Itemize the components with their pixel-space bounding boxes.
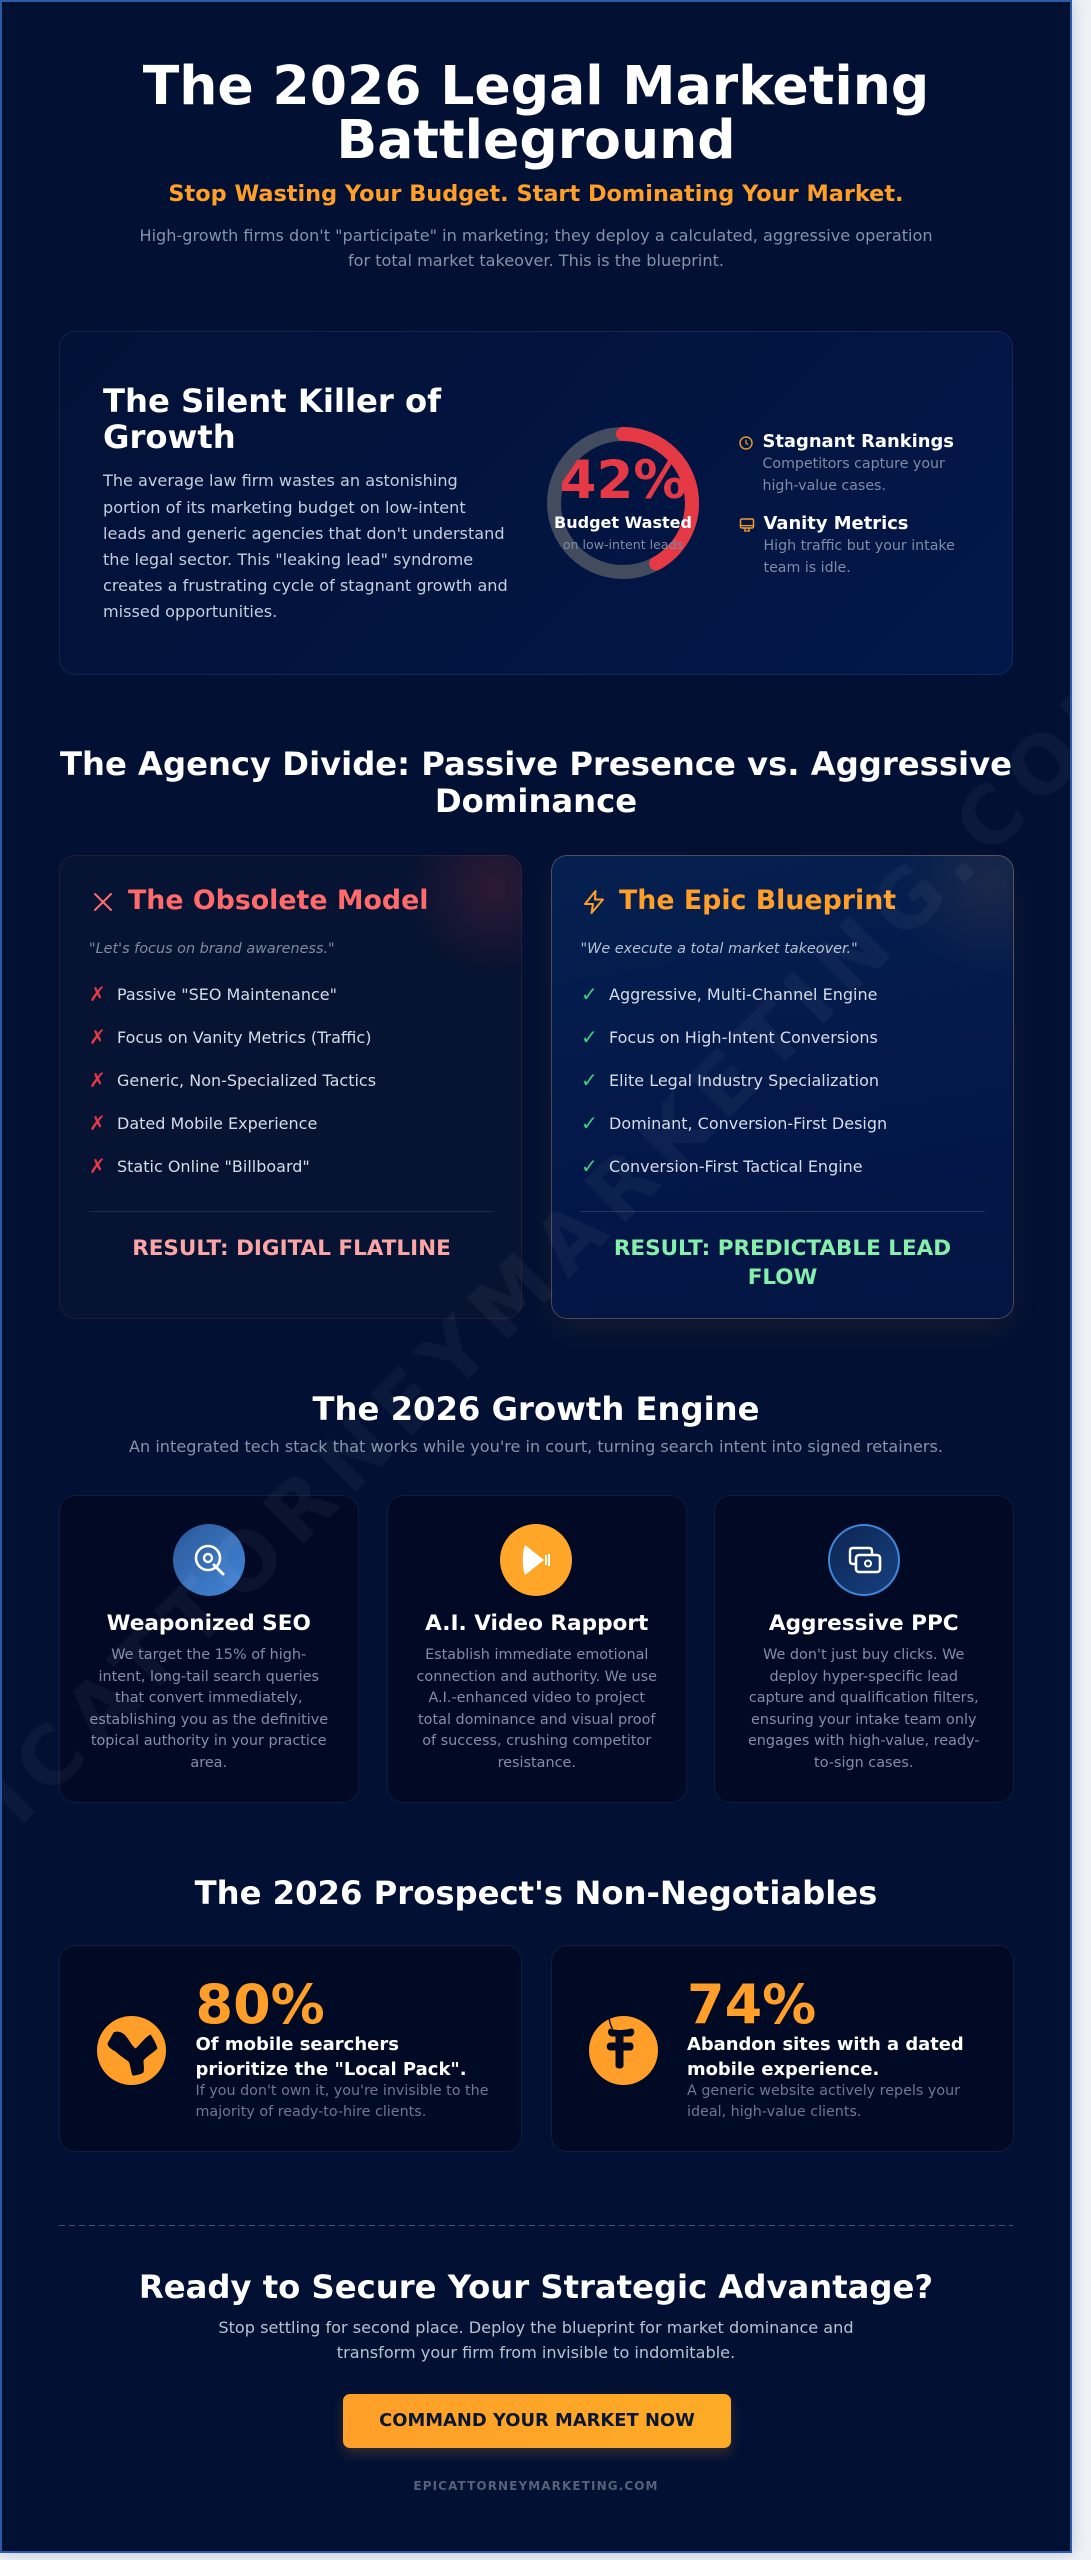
body text: missed opportunities. — [103, 602, 277, 621]
stat text: ideal, high-value clients. — [687, 2104, 861, 2120]
growth engine subtitle: An integrated tech stack that works while you're in court, turning search intent into signed retainers. — [129, 1436, 943, 1456]
stat label: Budget Wasted — [554, 512, 692, 532]
description: stagnant rankings — [762, 456, 945, 494]
panel: epic blueprint: ✓ — [581, 1154, 598, 1178]
stat text: A generic website actively repels your — [687, 2082, 960, 2098]
description: stagnant rankings: Competitors capture your — [762, 456, 945, 472]
stat number: 80% — [196, 1973, 325, 2036]
panel: weaponized seo — [59, 1495, 358, 1803]
panel: 74 percent stat — [551, 1945, 1014, 2152]
list: blueprint tactics: Aggressive, Multi-Channel Engine — [609, 984, 877, 1004]
body text — [102, 471, 508, 621]
card text: engages with high-value, ready- — [748, 1733, 980, 1749]
heading: epic blueprint: The Epic Blueprint — [619, 885, 896, 916]
panel: obsolete model: ✗ — [89, 982, 106, 1006]
call to action text: Stop settling for second place. Deploy the blueprint for market dominance and — [218, 2318, 854, 2337]
icon: dagger — [589, 2016, 658, 2085]
panel: obsolete model: ✗ — [89, 1024, 106, 1048]
stat title — [196, 2034, 467, 2080]
heading: silent killer — [103, 382, 442, 456]
title: The 2026 Legal Marketing — [143, 54, 929, 117]
icon: clock — [739, 436, 753, 450]
heading: silent killer: The Silent Killer of — [103, 382, 441, 420]
stat title: prioritize the "Local Pack". — [196, 2059, 467, 2080]
list: blueprint tactics: Focus on High-Intent Conversions — [609, 1028, 878, 1046]
card text — [748, 1647, 980, 1771]
body text: leads and generic agencies that don't understand — [103, 524, 505, 543]
description: vanity metrics — [764, 538, 955, 576]
list item: stagnant rankings: Stagnant Rankings — [762, 431, 954, 452]
icon: x — [94, 893, 112, 911]
button: command your market: COMMAND YOUR MARKET NOW — [379, 2410, 695, 2431]
list: obsolete tactics: Static Online "Billboard" — [117, 1156, 310, 1176]
icon: video — [500, 1524, 572, 1596]
card text: A.I.-enhanced video to project — [428, 1690, 645, 1706]
list: obsolete tactics: Passive "SEO Maintenance" — [117, 984, 337, 1004]
card text: ensuring your intake team only — [751, 1712, 976, 1728]
card text — [89, 1647, 328, 1771]
heading: growth engine: The 2026 Growth Engine — [313, 1390, 759, 1428]
card title: Weaponized SEO — [107, 1611, 311, 1636]
subtitle: Stop Wasting Your Budget. Start Dominating Your Market. — [168, 181, 904, 207]
stat text — [687, 2082, 960, 2120]
heading: agency divide: The Agency Divide: Passive Presence vs. Aggressive — [60, 745, 1012, 783]
card text — [416, 1647, 657, 1771]
description: vanity metrics: High traffic but your intake — [764, 538, 955, 554]
list: blueprint tactics — [581, 982, 887, 1178]
icon: monitor — [740, 518, 754, 532]
list: blueprint tactics: Dominant, Conversion-First Design — [609, 1114, 887, 1132]
call to action text — [218, 2318, 854, 2362]
stat title: Abandon sites with a dated — [687, 2034, 964, 2055]
panel: epic blueprint: ✓ — [581, 1024, 598, 1048]
icon: money cards — [828, 1524, 900, 1596]
list: obsolete tactics — [89, 982, 376, 1178]
card title: Aggressive PPC — [769, 1611, 959, 1636]
icon: lightning — [584, 890, 604, 914]
body text: creates a frustrating cycle of stagnant growth and — [103, 576, 508, 595]
stat text: majority of ready-to-hire clients. — [196, 2104, 426, 2120]
panel: epic blueprint: ✓ — [581, 1068, 598, 1092]
list: obsolete tactics: Dated Mobile Experience — [117, 1114, 317, 1132]
stat: 42 percent: 42% — [560, 450, 686, 511]
intro text — [139, 226, 933, 270]
card text: of success, crushing competitor — [422, 1733, 651, 1749]
result: predictable lead flow — [614, 1236, 951, 1290]
stat title — [687, 2034, 964, 2080]
stat text — [196, 2082, 489, 2120]
heading: obsolete model: The Obsolete Model — [128, 885, 428, 916]
body text: The average law firm wastes an astonishing — [103, 471, 458, 490]
card text: intent, long-tail search queries — [98, 1669, 319, 1685]
heading: non-negotiables: The 2026 Prospect's Non-Negotiables — [195, 1874, 877, 1912]
heading: agency divide: Dominance — [435, 782, 637, 820]
card text: resistance. — [498, 1755, 576, 1771]
heading: call to action: Ready to Secure Your Strategic Advantage? — [139, 2268, 933, 2306]
list: obsolete tactics: Generic, Non-Specialized Tactics — [117, 1070, 376, 1090]
body text: portion of its marketing budget on low-intent — [103, 498, 466, 517]
card text: establishing you as the definitive — [89, 1712, 328, 1728]
body text: the legal sector. This "leaking lead" syndrome — [103, 550, 473, 569]
stat title: Of mobile searchers — [196, 2034, 399, 2055]
panel: epic blueprint: ✓ — [581, 1110, 598, 1134]
list item: vanity metrics: Vanity Metrics — [764, 513, 908, 534]
card text: topical authority in your practice — [91, 1733, 327, 1749]
description: vanity metrics: team is idle. — [764, 560, 851, 576]
card text: area. — [190, 1755, 227, 1771]
description: stagnant rankings: high-value cases. — [762, 478, 886, 494]
list: blueprint tactics: Elite Legal Industry Specialization — [609, 1070, 879, 1090]
panel: obsolete model: ✗ — [89, 1154, 106, 1178]
title: Battleground — [336, 108, 736, 171]
card text: total dominance and visual proof — [418, 1712, 655, 1728]
card text: to-sign cases. — [814, 1755, 913, 1771]
call to action text: transform your firm from invisible to indomitable. — [337, 2343, 735, 2362]
list: obsolete tactics: Focus on Vanity Metrics (Traffic) — [117, 1028, 371, 1046]
card text: connection and authority. We use — [416, 1669, 657, 1685]
card title: A.I. Video Rapport — [425, 1611, 648, 1636]
heading: agency divide — [60, 745, 1012, 820]
result: predictable lead flow: FLOW — [748, 1265, 817, 1290]
card text: deploy hyper-specific lead — [769, 1669, 958, 1685]
panel: obsolete model: ✗ — [89, 1068, 106, 1092]
panel: epic blueprint: ✓ — [581, 982, 598, 1006]
panel: silent killer — [59, 331, 1013, 675]
result: digital flatline: RESULT: DIGITAL FLATLINE — [132, 1236, 451, 1261]
stat title: mobile experience. — [687, 2059, 879, 2080]
card text: We target the 15% of high- — [111, 1647, 306, 1663]
list: blueprint tactics: Conversion-First Tactical Engine — [609, 1156, 863, 1176]
button: command your market — [343, 2394, 731, 2448]
card text: that convert immediately, — [115, 1690, 303, 1706]
panel: obsolete model — [59, 855, 522, 1319]
heading: silent killer: Growth — [103, 418, 236, 456]
panel: epic blueprint — [551, 855, 1014, 1319]
panel: aggressive ppc — [714, 1495, 1014, 1803]
intro text: for total market takeover. This is the blueprint. — [348, 251, 724, 270]
icon: globe — [97, 2016, 166, 2085]
stat note: on low-intent leads — [563, 537, 683, 552]
icon: search — [172, 1524, 244, 1596]
panel: ai video rapport — [387, 1495, 686, 1803]
stat number: 74% — [687, 1973, 816, 2036]
quote: "Let's focus on brand awareness." — [89, 940, 335, 956]
intro text: High-growth firms don't "participate" in marketing; they deploy a calculated, aggressive operation — [139, 226, 933, 245]
panel: obsolete model: ✗ — [89, 1110, 106, 1134]
panel: 80 percent stat — [59, 1945, 522, 2152]
card text: We don't just buy clicks. We — [763, 1647, 964, 1663]
stat text: If you don't own it, you're invisible to the — [196, 2082, 489, 2098]
card text: Establish immediate emotional — [425, 1647, 648, 1663]
donut chart: 42 percent — [547, 427, 699, 579]
title — [143, 54, 929, 171]
footer url: EPICATTORNEYMARKETING.COM — [413, 2479, 659, 2493]
quote: "We execute a total market takeover." — [580, 940, 858, 956]
card text: capture and qualification filters, — [749, 1690, 979, 1706]
result: predictable lead flow: RESULT: PREDICTABLE LEAD — [614, 1236, 951, 1261]
